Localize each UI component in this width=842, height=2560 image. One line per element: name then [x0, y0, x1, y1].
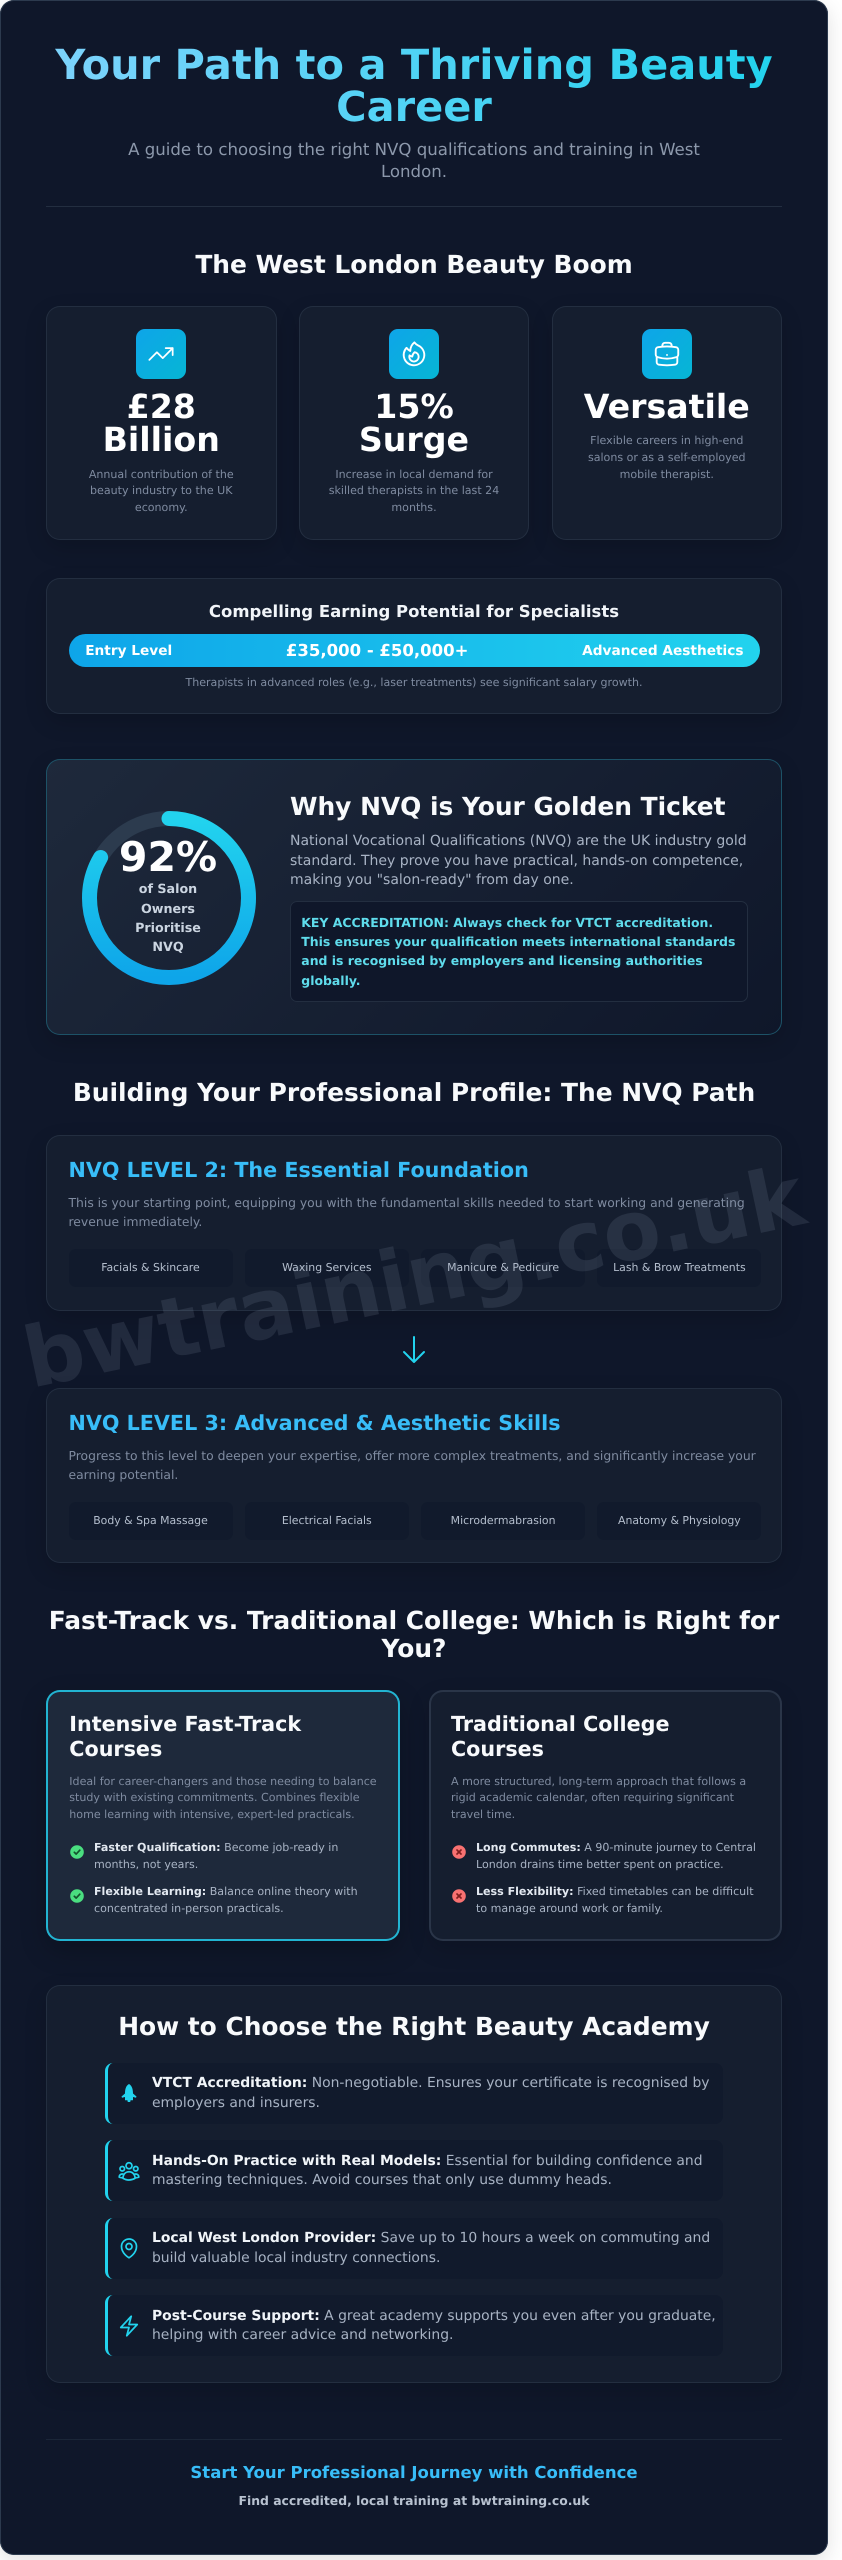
icon: briefcase: [642, 329, 692, 379]
level 2 description: [68, 1196, 745, 1229]
panel: earning potential: [46, 578, 782, 714]
heading: comparison: You?: [382, 1634, 446, 1663]
stat description: Flexible careers in high-end: [590, 434, 743, 447]
fast-track title: Intensive Fast-Track: [69, 1712, 301, 1736]
level 3 skills: Body & Spa Massage: [93, 1514, 208, 1527]
stat value: £28: [127, 387, 196, 426]
fast-track description: [69, 1775, 377, 1821]
subtitle: A guide to choosing the right NVQ qualifications and training in West: [128, 140, 700, 159]
benefit: faster qualification: [70, 1841, 338, 1871]
level 2 title: NVQ LEVEL 2: The Essential Foundation: [68, 1158, 529, 1182]
criterion: post-course support: [105, 2295, 723, 2356]
stat description: Annual contribution of the: [89, 468, 234, 481]
fast-track description: home learning with intensive, expert-led practicals.: [69, 1808, 355, 1821]
stat card: 15% Surge: [299, 306, 529, 540]
stat value: [103, 387, 220, 459]
earning heading: Compelling Earning Potential for Specialists: [209, 602, 619, 621]
callout: key accreditation: KEY ACCREDITATION: Always check for VTCT accreditation.: [301, 915, 713, 930]
traditional description: rigid academic calendar, often requiring significant: [451, 1791, 734, 1804]
benefit: faster qualification: Faster Qualification: Become job-ready in: [94, 1841, 338, 1854]
level 3 skills: Anatomy & Physiology: [618, 1514, 741, 1527]
subtitle: London.: [381, 162, 447, 181]
panel: why NVQ: [46, 759, 782, 1035]
NVQ explanation: [290, 833, 747, 888]
criterion: hands-on practice: mastering techniques. Avoid courses that only use dummy heads.: [152, 2172, 612, 2188]
salary bar: Advanced Aesthetics: [582, 642, 743, 658]
salary bar: [69, 634, 760, 667]
benefit: flexible learning: [70, 1885, 358, 1915]
stat description: Increase in local demand for: [335, 468, 493, 481]
benefit: faster qualification: months, not years.: [94, 1858, 198, 1871]
academy heading: How to Choose the Right Beauty Academy: [118, 2012, 710, 2041]
stat description: months.: [391, 501, 437, 514]
salary bar: £35,000 - £50,000+: [286, 641, 468, 660]
donut label: NVQ: [152, 939, 184, 954]
arrow: level 2 to level 3: [403, 1336, 425, 1363]
drawback: less flexibility: to manage around work or family.: [476, 1902, 663, 1915]
stat description: mobile therapist.: [620, 468, 714, 481]
stat description: beauty industry to the UK: [90, 484, 232, 497]
criterion: post-course support: Post-Course Support: A great academy supports you even after you graduate,: [152, 2308, 716, 2324]
criterion: hands-on practice: [105, 2140, 723, 2201]
stat description: [588, 434, 746, 481]
callout: key accreditation: [290, 901, 748, 1002]
drawback: less flexibility: Less Flexibility: Fixed timetables can be difficult: [476, 1885, 754, 1898]
level 2 skills: Manicure & Pedicure: [447, 1261, 559, 1274]
level 3 skills: [93, 1514, 741, 1527]
footer call to action: Start Your Professional Journey with Confidence: [190, 2463, 638, 2482]
stat value: [359, 387, 469, 459]
benefit: flexible learning: Flexible Learning: Balance online theory with: [94, 1885, 358, 1898]
heading: comparison: Fast-Track vs. Traditional College: Which is Right for: [49, 1606, 779, 1634]
stat value: 15%: [374, 387, 454, 426]
level 3 skills: Electrical Facials: [282, 1514, 372, 1527]
criterion: local provider: Local West London Provider: Save up to 10 hours a week on commuting and: [152, 2230, 710, 2246]
panel: traditional college: [428, 1690, 782, 1941]
panel: NVQ level 3: [46, 1388, 782, 1563]
stat value: Versatile: [584, 387, 750, 426]
callout: key accreditation: globally.: [301, 973, 361, 988]
level 2 skills: Waxing Services: [282, 1261, 372, 1274]
donut label: [135, 881, 201, 954]
criterion: post-course support: helping with career advice and networking.: [152, 2327, 453, 2343]
footer website note: Find accredited, local training at bwtraining.co.uk: [238, 2492, 590, 2508]
level 2 skills: Lash & Brow Treatments: [613, 1261, 746, 1274]
donut chart: 92%: [82, 811, 256, 985]
criterion: VTCT accreditation: employers and insurers.: [152, 2095, 320, 2111]
NVQ explanation: standard. They prove you have practical, hands-on competence,: [290, 853, 743, 869]
donut label: of Salon: [139, 881, 197, 896]
heading: comparison: [49, 1606, 780, 1663]
drawback: long commutes: [452, 1841, 756, 1871]
stat description: [89, 468, 234, 514]
heading: West London Beauty Boom: The West London Beauty Boom: [195, 250, 633, 279]
heading: golden ticket: Why NVQ is Your Golden Ticket: [290, 792, 726, 821]
title: [50, 44, 778, 128]
level 2 description: This is your starting point, equipping you with the fundamental skills needed to start working and generating: [68, 1196, 745, 1210]
level 3 title: NVQ LEVEL 3: Advanced & Aesthetic Skills: [68, 1411, 561, 1435]
drawback: less flexibility: [452, 1885, 754, 1915]
traditional title: [451, 1712, 670, 1761]
criterion: local provider: [105, 2218, 723, 2279]
level 2 skills: Facials & Skincare: [101, 1261, 200, 1274]
stat value: Surge: [359, 420, 469, 459]
NVQ explanation: making you "salon-ready" from day one.: [290, 872, 574, 888]
level 3 description: earning potential.: [68, 1468, 178, 1482]
icon: flame: [389, 329, 439, 379]
panel: NVQ level 2: [46, 1135, 782, 1311]
donut label: Prioritise: [135, 920, 201, 935]
icon: trending up: [136, 329, 186, 379]
traditional description: travel time.: [451, 1808, 515, 1821]
stat description: economy.: [135, 501, 188, 514]
title: Your Path to a Thriving Beauty: [55, 40, 773, 89]
salary bar: Entry Level: [85, 642, 172, 658]
level 3 description: [68, 1449, 756, 1482]
fast-track title: [69, 1712, 302, 1761]
benefit: flexible learning: concentrated in-person practicals.: [94, 1902, 284, 1915]
level 3 skills: Microdermabrasion: [451, 1514, 556, 1527]
panel: choosing an academy: [46, 1985, 782, 2383]
traditional description: [451, 1775, 746, 1821]
stat description: [329, 468, 499, 514]
traditional title: Traditional College: [451, 1712, 670, 1736]
stat description: skilled therapists in the last 24: [329, 484, 499, 497]
donut label: Owners: [141, 901, 195, 916]
fast-track description: study with existing commitments. Combines flexible: [69, 1791, 360, 1804]
title: Career: [336, 82, 492, 131]
stat description: salons or as a self-employed: [588, 451, 746, 464]
traditional description: A more structured, long-term approach that follows a: [451, 1775, 746, 1788]
subtitle: [128, 140, 700, 181]
salary caption: Therapists in advanced roles (e.g., laser treatments) see significant salary growth.: [185, 676, 643, 689]
stat card: Versatile: [552, 306, 782, 540]
drawback: long commutes: London drains time better spent on practice.: [476, 1858, 724, 1871]
stat value: Billion: [103, 420, 220, 459]
level 2 description: revenue immediately.: [68, 1215, 202, 1229]
level 2 skills: [101, 1261, 746, 1274]
NVQ explanation: National Vocational Qualifications (NVQ) are the UK industry gold: [290, 833, 747, 849]
donut value: 92%: [119, 833, 217, 881]
criterion: hands-on practice: Hands-On Practice with Real Models: Essential for building confidence and: [152, 2153, 703, 2169]
fast-track title: Courses: [69, 1737, 162, 1761]
level 3 description: Progress to this level to deepen your expertise, offer more complex treatments, and significantly increase your: [68, 1449, 756, 1463]
drawback: long commutes: Long Commutes: A 90-minute journey to Central: [476, 1841, 756, 1854]
fast-track description: Ideal for career-changers and those needing to balance: [69, 1775, 377, 1788]
panel: fast-track courses: [46, 1690, 400, 1941]
stat card: £28 Billion: [46, 306, 276, 540]
criterion: VTCT accreditation: [105, 2063, 723, 2124]
callout: key accreditation: and is recognised by employers and licensing authorities: [301, 953, 703, 968]
traditional title: Courses: [451, 1737, 544, 1761]
heading: NVQ path: Building Your Professional Profile: The NVQ Path: [73, 1078, 755, 1107]
criterion: local provider: build valuable local industry connections.: [152, 2250, 440, 2266]
criterion: VTCT accreditation: VTCT Accreditation: Non-negotiable. Ensures your certificate is recognised by: [152, 2075, 709, 2091]
watermark: bwtraining.co.uk: [15, 1147, 813, 1407]
callout: key accreditation: This ensures your qualification meets international standards: [301, 934, 735, 949]
